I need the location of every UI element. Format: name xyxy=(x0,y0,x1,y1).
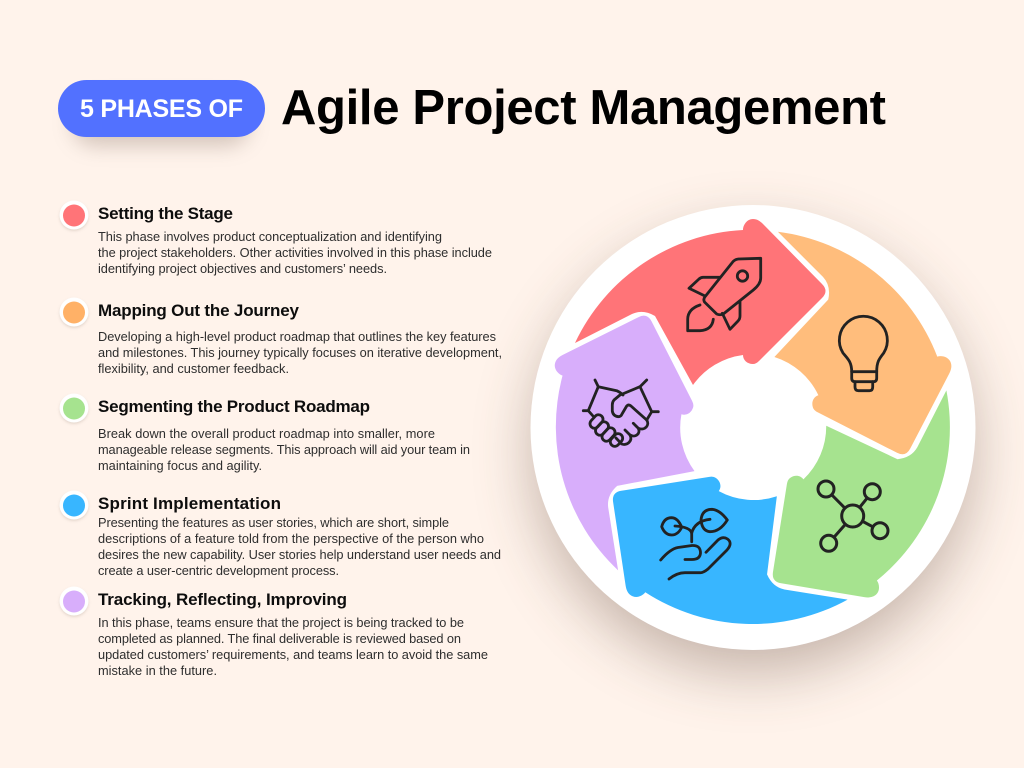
phase 4 text: Sprint Implementation: create a user-centric development process. xyxy=(98,563,339,578)
segment: purple arrow xyxy=(500,294,735,583)
header pill: 5 phases of: 5 PHASES OF xyxy=(80,95,243,123)
phase 1 text: Setting the Stage: Setting the Stage xyxy=(98,204,233,223)
bullet: blue xyxy=(60,490,88,520)
segment: blue arrow xyxy=(572,418,872,700)
bullet: orange xyxy=(60,298,88,328)
phase 1 text: Setting the Stage xyxy=(60,200,492,276)
phase 3 text: Segmenting the Product Roadmap: maintaining focus and agility. xyxy=(98,458,262,473)
icon: light bulb xyxy=(839,316,887,391)
phase 2 text: Mapping Out the Journey: Developing a high-level product roadmap that outlines the key features xyxy=(98,329,496,344)
icon: network nodes xyxy=(818,481,888,551)
phase 3 text: Segmenting the Product Roadmap: manageable release segments. This approach will aid your team in xyxy=(98,442,470,457)
phase 1 text: Setting the Stage: the project stakeholders. Other activities involved in this phase include xyxy=(98,245,492,260)
segment: green arrow xyxy=(719,356,1019,638)
phase 5 text: Tracking, Reflecting, Improving: mistake in the future. xyxy=(98,663,217,678)
phase 5 text: Tracking, Reflecting, Improving: updated customers’ requirements, and teams learn to avoid the same xyxy=(98,647,488,662)
phase 2 text: Mapping Out the Journey: and milestones. This journey typically focuses on iterative development, xyxy=(98,345,502,360)
phase 5 text: Tracking, Reflecting, Improving xyxy=(60,586,488,678)
phase 2 text: Mapping Out the Journey xyxy=(60,298,502,376)
icon: hand with sprout xyxy=(661,509,730,579)
phase 2 text: Mapping Out the Journey: Mapping Out the Journey xyxy=(98,301,300,320)
phase 5 text: Tracking, Reflecting, Improving: Tracking, Reflecting, Improving xyxy=(98,590,347,609)
icon: rocket xyxy=(688,258,761,331)
cycle wheel xyxy=(500,193,1019,700)
phase 3 text: Segmenting the Product Roadmap: Break down the overall product roadmap into smaller, more xyxy=(98,426,435,441)
header pill: 5 phases of xyxy=(58,80,265,146)
phase 5 text: Tracking, Reflecting, Improving: In this phase, teams ensure that the project is being tracked to be xyxy=(98,615,464,630)
phase 3 text: Segmenting the Product Roadmap: Segmenting the Product Roadmap xyxy=(98,397,370,416)
segment: orange arrow xyxy=(738,193,973,483)
wheel white disc xyxy=(530,205,976,650)
phase 1 text: Setting the Stage: identifying project objectives and customers’ needs. xyxy=(98,261,387,276)
phase 2 text: Mapping Out the Journey: flexibility, and customer feedback. xyxy=(98,361,289,376)
phase 4 text: Sprint Implementation: desires the new capability. User stories help understand user needs and xyxy=(98,547,501,562)
bullet: red xyxy=(60,200,88,230)
phase 4 text: Sprint Implementation: Sprint Implementation xyxy=(98,494,281,513)
bullet: purple xyxy=(60,586,88,616)
bullet: green xyxy=(60,394,88,424)
phase 4 text: Sprint Implementation: descriptions of a feature told from the perspective of the person who xyxy=(98,531,484,546)
phase 4 text: Sprint Implementation xyxy=(60,490,501,578)
icon: handshake xyxy=(583,380,658,448)
segment: red arrow xyxy=(575,219,826,385)
phase 1 text: Setting the Stage: This phase involves product conceptualization and identifying xyxy=(98,229,442,244)
title: Agile Project Management xyxy=(281,81,886,135)
phase 4 text: Sprint Implementation: Presenting the features as user stories, which are short, simple xyxy=(98,515,449,530)
phase 3 text: Segmenting the Product Roadmap xyxy=(60,394,470,473)
wheel shadow xyxy=(533,232,973,672)
phase 5 text: Tracking, Reflecting, Improving: completed as planned. The final deliverable is reviewed based on xyxy=(98,631,461,646)
